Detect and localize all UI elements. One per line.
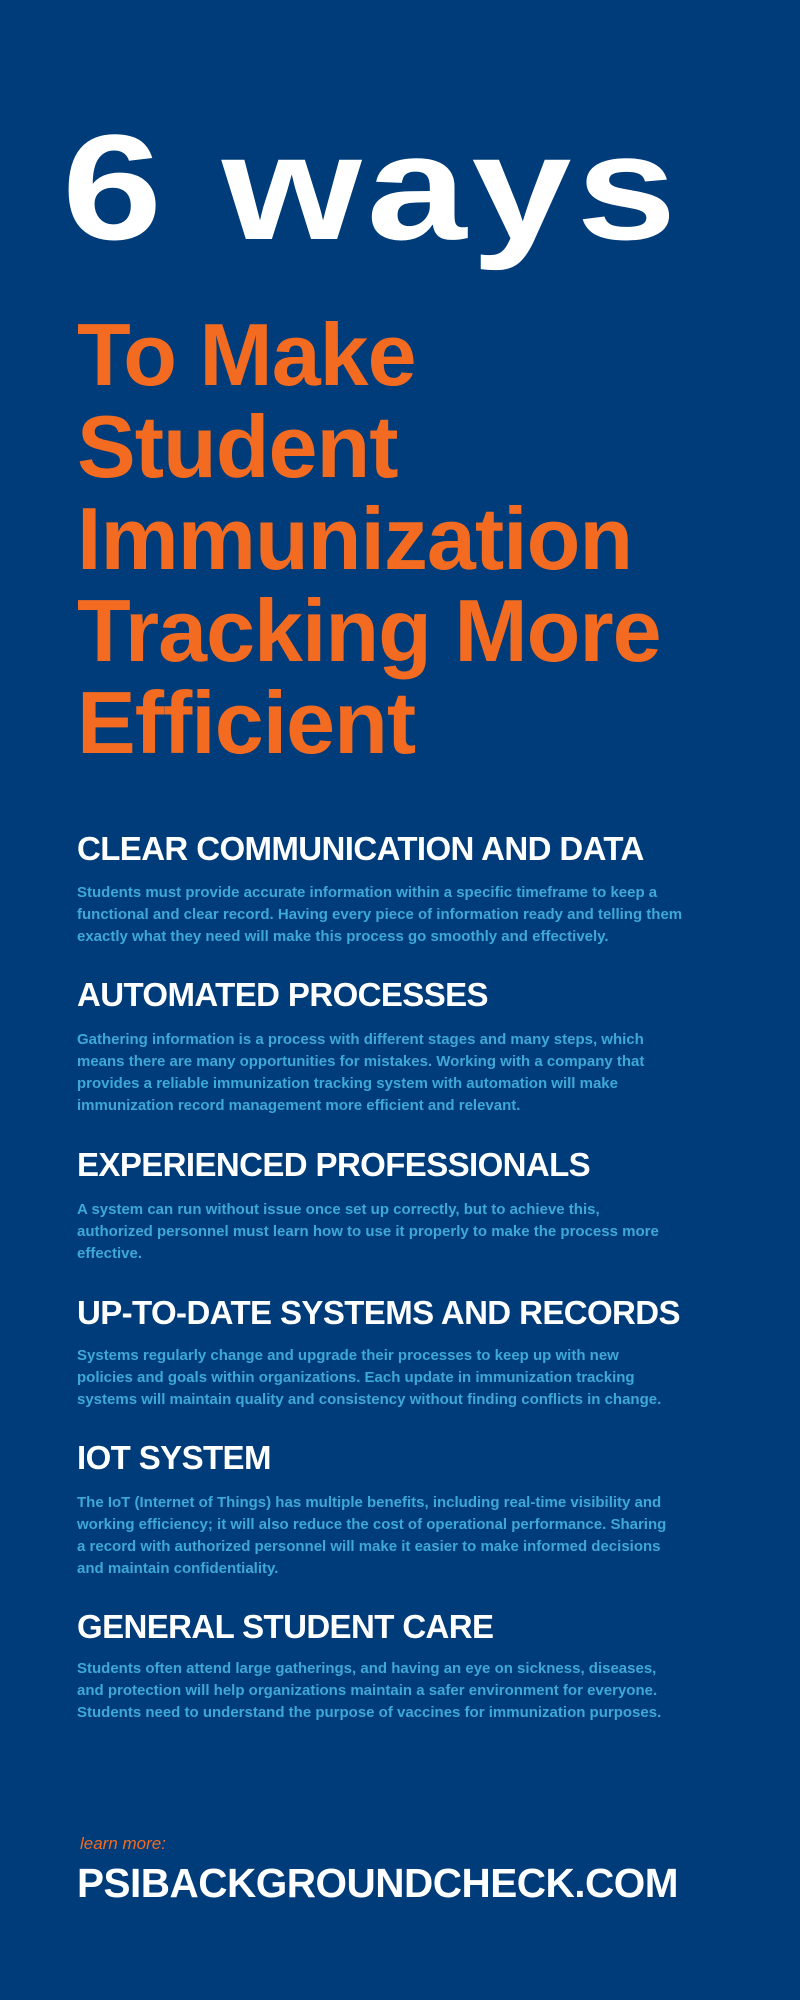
website url: PSIBACKGROUNDCHECK.COM [77, 1860, 678, 1906]
body: experienced: A system can run without issue once set up correctly, but to achieve this, [77, 1201, 600, 1218]
body: general care: Students need to understand the purpose of vaccines for immunization purposes. [77, 1704, 661, 1721]
body: general care: Students often attend large gatherings, and having an eye on sickness, diseases, [77, 1660, 656, 1677]
body: automated: means there are many opportunities for mistakes. Working with a company that [77, 1053, 644, 1070]
body: general care: and protection will help organizations maintain a safer environment for everyone. [77, 1682, 657, 1699]
heading: automated: AUTOMATED PROCESSES [77, 976, 488, 1013]
title: 6 ways: 6 ways [62, 103, 681, 271]
learn more label: learn more: [80, 1834, 166, 1853]
body: automated: Gathering information is a process with different stages and many steps, which [77, 1031, 644, 1048]
body: up-to-date: Systems regularly change and upgrade their processes to keep up with new [77, 1347, 619, 1364]
body: up-to-date [77, 1347, 661, 1408]
body: clear communication: functional and clear record. Having every piece of information ready and telling them [77, 906, 682, 923]
heading: general care: GENERAL STUDENT CARE [77, 1608, 493, 1645]
body: automated [77, 1031, 644, 1114]
body: iot: and maintain confidentiality. [77, 1560, 278, 1577]
body: iot: a record with authorized personnel will make it easier to make informed decisions [77, 1538, 660, 1555]
heading: clear communication: CLEAR COMMUNICATION AND DATA [77, 830, 644, 867]
body: iot: working efficiency; it will also reduce the cost of operational performance. Sharing [77, 1516, 666, 1533]
subtitle: Efficient [77, 673, 415, 772]
body: iot: The IoT (Internet of Things) has multiple benefits, including real-time visibility and [77, 1494, 661, 1511]
subtitle: Tracking More [77, 581, 661, 680]
body: clear communication [77, 884, 682, 945]
subtitle: Immunization [77, 489, 632, 588]
body: experienced: effective. [77, 1245, 142, 1262]
body: iot [77, 1494, 666, 1577]
subtitle: To Make [77, 305, 416, 404]
heading: iot: IOT SYSTEM [77, 1439, 271, 1476]
body: clear communication: exactly what they need will make this process go smoothly and effectively. [77, 928, 609, 945]
heading: up-to-date: UP-TO-DATE SYSTEMS AND RECORDS [77, 1294, 680, 1331]
subtitle: Student [77, 397, 398, 496]
body: general care [77, 1660, 661, 1721]
body: experienced [77, 1201, 659, 1262]
body: automated: immunization record management more efficient and relevant. [77, 1097, 520, 1114]
body: automated: provides a reliable immunization tracking system with automation will make [77, 1075, 618, 1092]
body: clear communication: Students must provide accurate information within a specific timeframe to keep a [77, 884, 657, 901]
subtitle [77, 305, 661, 772]
heading: experienced: EXPERIENCED PROFESSIONALS [77, 1146, 590, 1183]
body: up-to-date: policies and goals within organizations. Each update in immunization tracking [77, 1369, 635, 1386]
body: experienced: authorized personnel must learn how to use it properly to make the process more [77, 1223, 659, 1240]
body: up-to-date: systems will maintain quality and consistency without finding conflicts in change. [77, 1391, 661, 1408]
